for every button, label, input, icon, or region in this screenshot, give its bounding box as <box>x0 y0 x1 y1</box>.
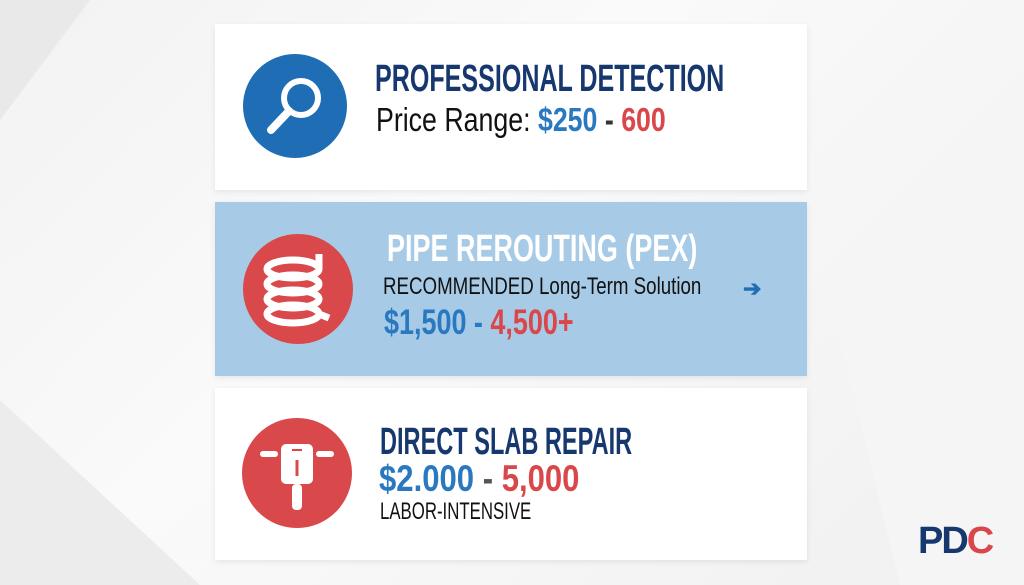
price: Price Range: $250 - 600 <box>376 101 666 138</box>
icon: jackhammer <box>242 418 352 528</box>
logo: PDC <box>918 520 992 562</box>
panel: pipe rerouting <box>215 202 807 376</box>
price: $1,500 - 4,500+ <box>384 303 574 342</box>
price: $2.000 - 5,000 <box>379 458 579 499</box>
subtitle: LABOR-INTENSIVE <box>380 498 531 525</box>
icon: magnifier <box>243 54 347 158</box>
icon: coil <box>243 234 353 344</box>
heading: DIRECT SLAB REPAIR <box>380 421 632 463</box>
heading: PROFESSIONAL DETECTION <box>375 58 724 100</box>
heading: PIPE REROUTING (PEX) <box>387 228 697 270</box>
arrow: ➔ <box>743 276 761 301</box>
panel: direct slab repair <box>215 388 807 560</box>
panel: professional detection <box>215 24 807 190</box>
subtitle: RECOMMENDED Long-Term Solution <box>383 273 701 300</box>
